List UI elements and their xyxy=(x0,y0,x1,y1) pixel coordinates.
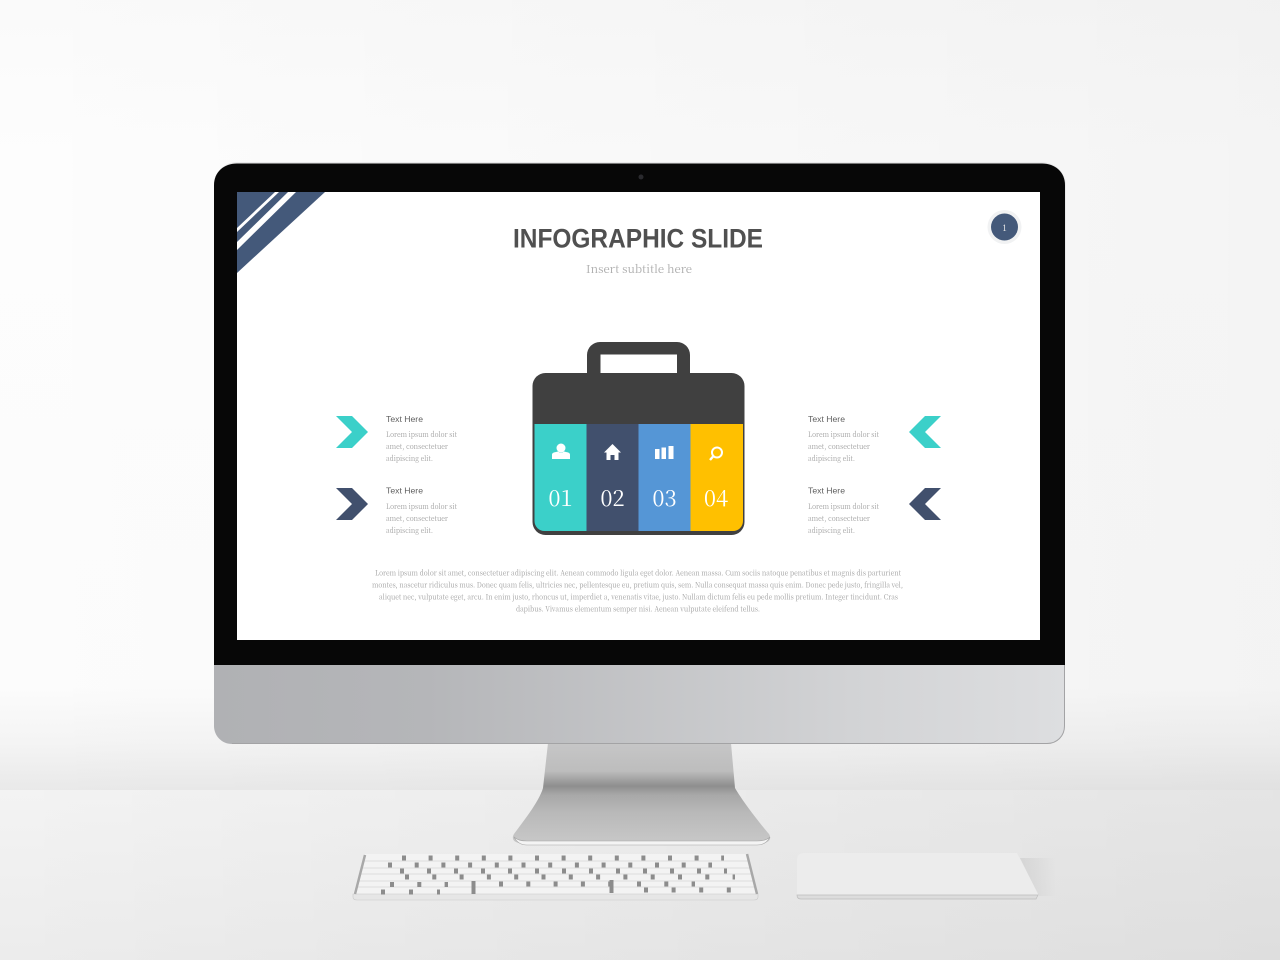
coloured columns xyxy=(534,424,744,532)
briefcase body xyxy=(532,373,744,535)
icon: bar chart xyxy=(655,446,674,459)
keyboard xyxy=(353,854,758,900)
key rows xyxy=(381,858,735,894)
keyboard row separators xyxy=(356,861,756,887)
trackpad shadow xyxy=(1020,858,1056,896)
icon: house xyxy=(604,444,621,460)
page number badge xyxy=(988,210,1022,244)
arrow: teal chevron right xyxy=(336,416,368,448)
monitor stand xyxy=(513,743,770,845)
trackpad xyxy=(797,853,1056,899)
bottom paragraph: montes, nascetur ridiculus mus. Donec quam felis, ultricies nec, pellentesque eu, pretium quis, sem. Nulla consequat massa quis enim. Donec pede justo, fringilla vel, xyxy=(372,580,903,590)
heading: Text Here xyxy=(386,486,423,496)
text block: Lorem ipsum dolor sit xyxy=(386,501,457,512)
bottom paragraph: dapibus. Vivamus elementum semper nisi. Aenean vulputate eleifend tellus. xyxy=(516,604,760,614)
text block: adipiscing elit. xyxy=(808,453,855,464)
left item 1 xyxy=(336,414,457,464)
arrow: teal chevron left xyxy=(909,416,941,448)
text block: amet, consectetuer xyxy=(386,441,448,452)
slide screen xyxy=(237,192,1040,640)
icon: person xyxy=(552,444,570,459)
text block: adipiscing elit. xyxy=(386,525,433,536)
keyboard body xyxy=(353,854,758,899)
text block: adipiscing elit. xyxy=(808,525,855,536)
monitor top edge highlight xyxy=(214,162,1066,300)
keyboard front lip xyxy=(353,894,758,900)
text block: Lorem ipsum dolor sit xyxy=(808,501,879,512)
arrow: navy chevron left xyxy=(909,488,941,520)
number 03: 03 xyxy=(652,482,677,513)
camera xyxy=(638,174,644,180)
text block: Lorem ipsum dolor sit xyxy=(808,429,879,440)
briefcase infographic xyxy=(532,342,744,535)
bottom paragraph: aliquet nec, vulputate eget, arcu. In enim justo, rhoncus ut, imperdiet a, venenatis vitae, justo. Nullam dictum felis eu pede mollis pretium. Integer tincidunt. Cras xyxy=(379,592,898,602)
text block: amet, consectetuer xyxy=(386,513,448,524)
subtitle: Insert subtitle here xyxy=(586,261,692,277)
number 04: 04 xyxy=(704,482,728,513)
trackpad surface xyxy=(797,853,1038,895)
desktop monitor xyxy=(214,162,1066,845)
text block: amet, consectetuer xyxy=(808,441,870,452)
keyboard side edges xyxy=(355,854,757,894)
title: INFOGRAPHIC SLIDE xyxy=(513,224,763,254)
number 01: 01 xyxy=(548,482,573,513)
text block: Lorem ipsum dolor sit xyxy=(386,429,457,440)
text block: adipiscing elit. xyxy=(386,453,433,464)
text block: amet, consectetuer xyxy=(808,513,870,524)
right item 2 xyxy=(808,486,941,536)
monitor chin edge xyxy=(232,665,1064,744)
trackpad front lip xyxy=(797,895,1038,899)
left item 2 xyxy=(336,486,457,536)
background: desk xyxy=(0,790,1280,960)
bottom paragraph: Lorem ipsum dolor sit amet, consectetuer adipiscing elit. Aenean commodo ligula eget dolor. Aenean massa. Cum sociis natoque penatibus et magnis dis parturient xyxy=(375,568,901,578)
background: desk side shading xyxy=(0,790,1280,960)
arrow: navy chevron right xyxy=(336,488,368,520)
heading: Text Here xyxy=(808,414,845,424)
heading: Text Here xyxy=(386,414,423,424)
heading: Text Here xyxy=(808,486,845,496)
number 02: 02 xyxy=(600,482,625,513)
page number badge: 1 xyxy=(1002,223,1007,233)
monitor chin xyxy=(214,664,1065,744)
right item 1 xyxy=(808,414,941,464)
briefcase handle xyxy=(587,342,690,376)
monitor bezel xyxy=(214,164,1065,665)
icon: magnifier xyxy=(710,448,722,460)
corner stripe decoration xyxy=(237,192,325,273)
